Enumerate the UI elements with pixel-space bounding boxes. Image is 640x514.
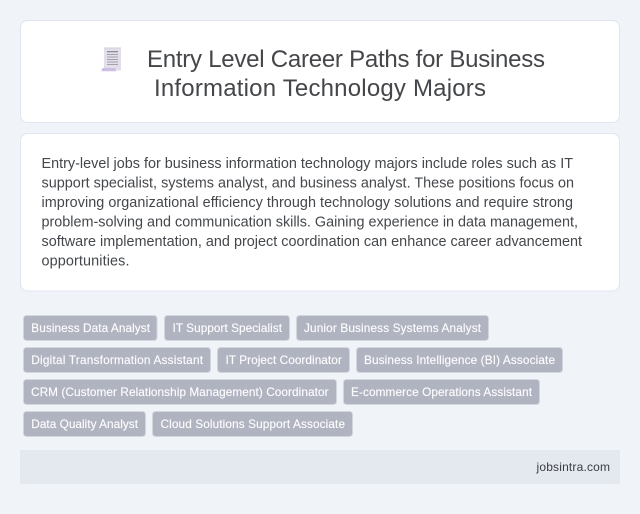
tag: IT Support Specialist — [164, 316, 290, 340]
tag: Digital Transformation Assistant — [24, 348, 210, 372]
tag: IT Project Coordinator: IT Project Coordinator — [226, 353, 342, 367]
title text: Entry Level Career Paths for Business — [147, 46, 545, 73]
description text — [42, 156, 582, 270]
tag: E-commerce Operations Assistant — [344, 380, 540, 404]
tag: CRM (Customer Relationship Management) Coordinator: CRM (Customer Relationship Management) Coordinator — [31, 385, 329, 399]
panel: title card — [20, 20, 620, 122]
title text — [147, 46, 545, 102]
footer bar — [20, 450, 620, 484]
tag: Junior Business Systems Analyst — [296, 316, 488, 340]
description text: improving organizational efficiency through technology solutions and require strong — [42, 195, 573, 211]
description text: software implementation, and project coordination can enhance career advancement — [42, 234, 582, 250]
tag: Junior Business Systems Analyst: Junior Business Systems Analyst — [304, 321, 482, 335]
title text: Information Technology Majors — [154, 75, 486, 102]
footer source text: jobsintra.com — [536, 460, 610, 474]
tag: Cloud Solutions Support Associate: Cloud Solutions Support Associate — [160, 417, 345, 431]
tag: Business Data Analyst — [24, 316, 157, 340]
description text: opportunities. — [42, 254, 130, 270]
job role tags — [24, 316, 562, 436]
panel: description card — [20, 134, 620, 291]
tag: Digital Transformation Assistant: Digital Transformation Assistant — [31, 353, 204, 367]
tag: E-commerce Operations Assistant: E-commerce Operations Assistant — [351, 385, 533, 399]
tag: Cloud Solutions Support Associate — [152, 412, 352, 436]
tag: Data Quality Analyst — [24, 412, 146, 436]
tag: IT Support Specialist: IT Support Specialist — [172, 321, 283, 335]
description text: support specialist, systems analyst, and business analyst. These positions focus on — [42, 176, 574, 192]
description text: problem-solving and communication skills. Gaining experience in data management, — [42, 214, 578, 230]
icon: document scroll — [102, 48, 121, 71]
tag: IT Project Coordinator — [218, 348, 350, 372]
tag: Data Quality Analyst: Data Quality Analyst — [31, 417, 139, 431]
tag: CRM (Customer Relationship Management) Coordinator — [24, 380, 336, 404]
description text: Entry-level jobs for business information technology majors include roles such as IT — [42, 156, 573, 172]
tag: Business Data Analyst: Business Data Analyst — [31, 321, 151, 335]
tag: Business Intelligence (BI) Associate — [356, 348, 562, 372]
tag: Business Intelligence (BI) Associate: Business Intelligence (BI) Associate — [364, 353, 555, 367]
